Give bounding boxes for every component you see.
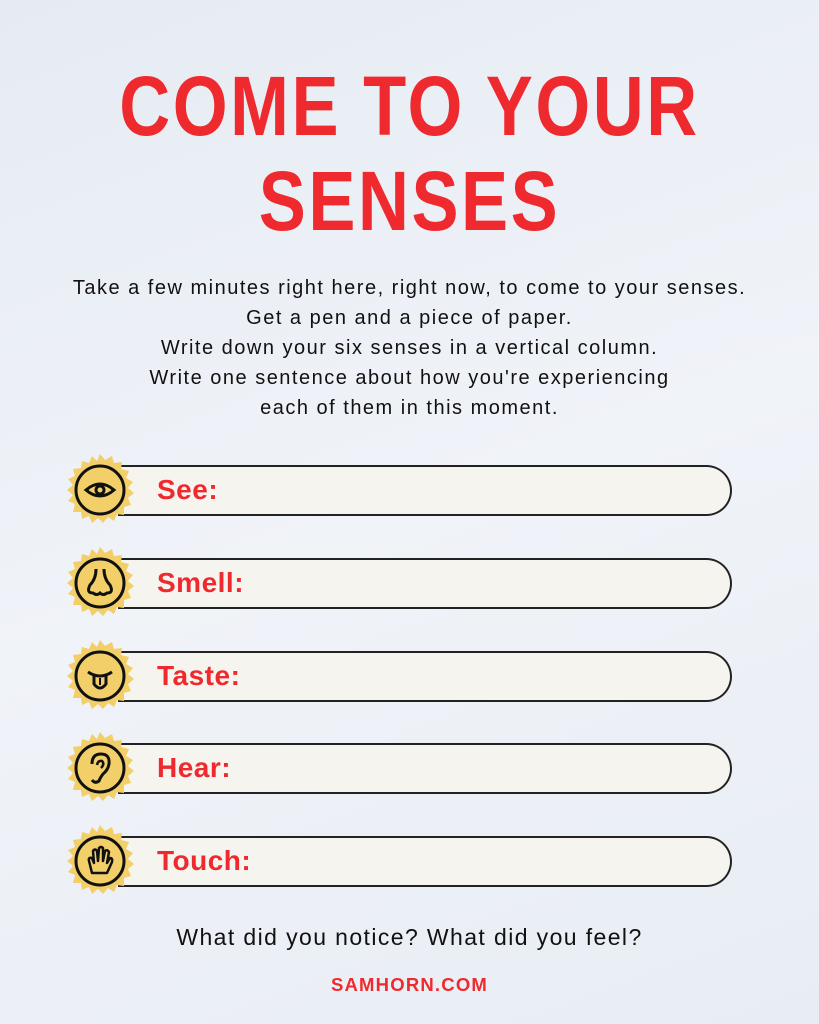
text: SENSES: [259, 154, 560, 248]
row: hear: [67, 732, 732, 801]
row: see: [67, 454, 732, 523]
intro text: Write one sentence about how you're experiencing: [149, 367, 670, 389]
row: touch: [67, 825, 732, 894]
intro text: Get a pen and a piece of paper.: [246, 307, 573, 329]
icon: ear: [67, 732, 134, 801]
footer: website: SAMHORN.COM: [331, 974, 488, 995]
row: taste: [67, 640, 732, 709]
intro text: each of them in this moment.: [260, 397, 559, 419]
icon: eye: [67, 454, 134, 523]
label: Hear:: [157, 752, 231, 783]
closing question: What did you notice? What did you feel?: [176, 924, 643, 950]
title: [119, 59, 700, 248]
label: Taste:: [157, 660, 240, 691]
intro text: [73, 277, 746, 419]
intro text: Take a few minutes right here, right now, to come to your senses.: [73, 277, 746, 299]
row: smell: [67, 547, 732, 616]
label: Smell:: [157, 567, 244, 598]
icon: tongue: [67, 640, 134, 709]
text: COME TO YOUR: [119, 59, 700, 153]
icon: hand: [67, 825, 134, 894]
intro text: Write down your six senses in a vertical column.: [161, 337, 658, 359]
label: See:: [157, 474, 218, 505]
icon: nose: [67, 547, 134, 616]
label: Touch:: [157, 845, 251, 876]
